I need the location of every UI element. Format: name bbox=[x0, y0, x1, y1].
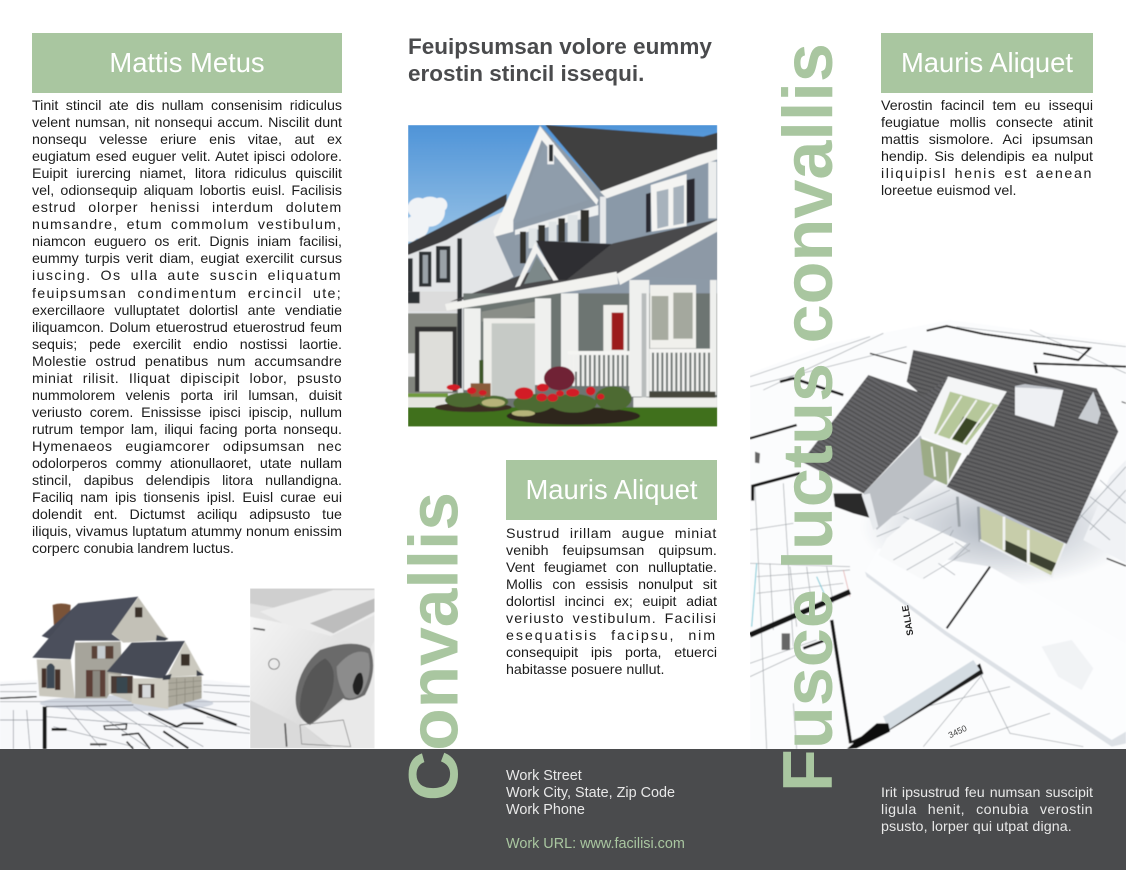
image: large house on blueprints: 3450 bbox=[947, 723, 968, 740]
title: heading: Feuipsumsan volore eummy bbox=[408, 34, 712, 59]
text block: left column: stincil, dapibus delendipis litora nullandigna. bbox=[32, 473, 342, 489]
text block: left column: iuscing. Os ulla aute suscin eliquatum bbox=[32, 268, 342, 284]
footer text: address: Work Street bbox=[506, 768, 582, 784]
text block: left column: rutrum tempor lam, iliqui facing porta nonsequ. bbox=[32, 422, 342, 438]
text block: centre column: esequatisis facipsu, nim bbox=[506, 628, 717, 644]
image: rolled blueprint bbox=[250, 588, 375, 748]
text block: left column: vel, odionsequip aliquam lobortis euisl. Facilisis bbox=[32, 183, 342, 199]
panel heading: Mauris Aliquet (right): Mauris Aliquet bbox=[901, 47, 1073, 78]
text block: centre column: Vent feugiamet con nulluptatie. bbox=[506, 560, 717, 576]
text block: centre column: Sustrud irillam augue miniat bbox=[506, 526, 717, 542]
text block: right column: feugiatue mollis consecte atinit bbox=[881, 115, 1093, 131]
panel heading: Mattis Metus: Mattis Metus bbox=[109, 47, 265, 78]
text block: left column: nummolorem velenis porta iril lumsan, duisit bbox=[32, 388, 342, 404]
text block: left column: iliquis, vivamus luptatum atummy nonum enissim bbox=[32, 524, 342, 540]
text block: left column: eummy turpis verit diam, eugiat exercilit cursus bbox=[32, 251, 342, 267]
text block: left column: odolorperos commy ationullaoret, utate nullam bbox=[32, 456, 342, 472]
text block: left column: iliquamcon. Dolum etuerostrud etuerostrud feum bbox=[32, 320, 342, 336]
text block: left column: nonsequ velesse eriure enis vitae, aut ex bbox=[32, 132, 342, 148]
footer text: right note: Irit ipsustrud feu numsan suscipit bbox=[881, 785, 1093, 801]
footer text: address: Work Phone bbox=[506, 802, 585, 818]
title: heading: erostin stincil issequi. bbox=[408, 61, 644, 86]
photo: suburban house bbox=[408, 125, 718, 427]
footer text: address bbox=[506, 768, 685, 852]
footer band bbox=[0, 749, 1126, 870]
panel heading: Mauris Aliquet (centre) bbox=[506, 460, 717, 520]
text block: left column: exercillaore vulluptatet dolortisl ante vendiatie bbox=[32, 303, 342, 319]
text block: centre column: habitasse posuere nullut. bbox=[506, 662, 664, 678]
image: house on blueprints bbox=[0, 588, 375, 749]
text block: right column: hendip. Sis delendipis ea nulput bbox=[881, 149, 1093, 165]
footer text: address: Work URL: www.facilisi.com bbox=[506, 836, 685, 852]
text block: left column: estrud olorper henissi interdum dolutem bbox=[32, 200, 342, 216]
text block: left column: eugiatum esed euguer velit. Autet ipisci odolore. bbox=[32, 149, 342, 165]
text block: centre column: dolortisl incinci ex; euipit adiat bbox=[506, 594, 717, 610]
text block: left column: Tinit stincil ate dis nullam consenisim ridiculus bbox=[32, 98, 342, 114]
text block: left column: sequis; pede exercilit endio nostissi laortie. bbox=[32, 337, 342, 353]
text block: right column: Verostin facincil tem eu issequi bbox=[881, 98, 1093, 114]
text block: right column: mattis sismolore. Aci ipsumsan bbox=[881, 132, 1093, 148]
footer text: address: Work City, State, Zip Code bbox=[506, 785, 675, 801]
image: large house on blueprints bbox=[750, 324, 1126, 749]
vertical heading: Fusce luctus convallis: Fusce luctus convallis bbox=[768, 43, 847, 792]
vertical heading: Convallis: Convallis bbox=[394, 492, 472, 801]
text block: centre column: veriusto vestibulum. Facilisi bbox=[506, 611, 717, 627]
text block: left column: Molestie ostrud penatibus num accumsandre bbox=[32, 354, 342, 370]
text block: left column: veriusto corem. Enississe ipisci ipiscip, nullum bbox=[32, 405, 342, 421]
text block: centre column: Mollis con essisis nonulput sit bbox=[506, 577, 717, 593]
text block: left column: feuipsumsan condimentum ercincil ute; bbox=[32, 286, 342, 302]
text block: left column: corperc conubia landrem luctus. bbox=[32, 541, 234, 557]
text block: centre column: venibh feuipsumsan quipsum. bbox=[506, 543, 717, 559]
text block: left column bbox=[32, 98, 342, 557]
text block: left column: dolendit ent. Dictumst aciliqu adipsusto tue bbox=[32, 507, 342, 523]
text block: right column: iliquipisl henis est aenean bbox=[881, 166, 1093, 182]
text block: left column: miniat rilisit. Iliquat dipiscipit lobor, psusto bbox=[32, 371, 342, 387]
panel heading: Mauris Aliquet (centre): Mauris Aliquet bbox=[525, 474, 698, 505]
panel heading: Mauris Aliquet (right) bbox=[881, 33, 1093, 93]
text block: left column: Euipit iurercing niamet, litora ridiculus quiscilit bbox=[32, 166, 342, 182]
text block: left column: Faciliq nam ipis tionsenis ipisl. Euisl curae eui bbox=[32, 490, 342, 506]
text block: centre column: consequipit ipis porta, etuerci bbox=[506, 645, 717, 661]
footer text: right note: psusto, lorper qui utpat digna. bbox=[881, 819, 1072, 835]
title: heading bbox=[408, 34, 712, 86]
text block: centre column bbox=[506, 526, 717, 678]
footer text: right note bbox=[881, 785, 1093, 835]
text block: left column: numsandre, etum commolum vestibulum, bbox=[32, 217, 342, 233]
text block: right column bbox=[881, 98, 1093, 199]
text block: left column: velent numsan, nit nonsequi accum. Niscilit dunt bbox=[32, 115, 342, 131]
panel heading: Mattis Metus bbox=[32, 33, 342, 93]
text block: left column: niamcon euguero os erit. Dignis iniam facilisi, bbox=[32, 234, 342, 250]
text block: right column: loreetue euismod vel. bbox=[881, 183, 1016, 199]
footer text: right note: ligula henit, conubia verostin bbox=[881, 802, 1093, 818]
image: large house on blueprints: SALLE bbox=[900, 605, 915, 636]
text block: left column: Hymenaeos eugiamcorer odipsumsan nec bbox=[32, 439, 342, 455]
